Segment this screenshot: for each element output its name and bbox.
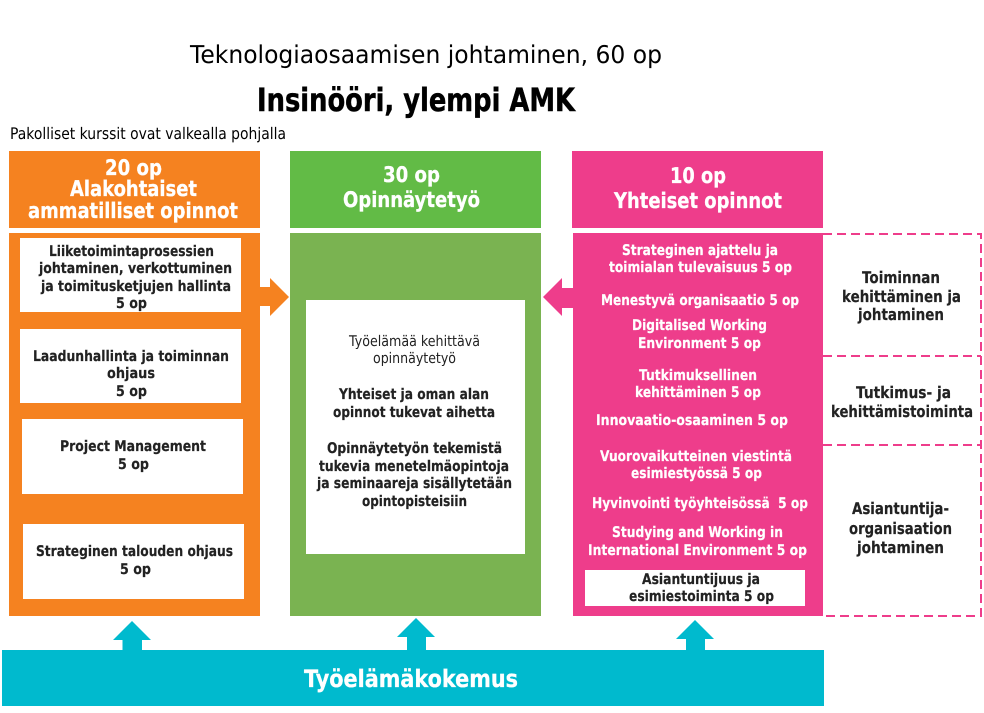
course: Laadunhallinta: 5 op — [116, 383, 147, 400]
heading: pink column — [572, 151, 823, 228]
heading: orange column: 20 op — [105, 156, 162, 181]
course list: Strateginen ajattelu ja — [622, 242, 778, 259]
arrow: up to orange panel — [113, 621, 151, 650]
arrow: up to thesis panel — [397, 618, 435, 650]
thesis text box: opinnäytetyö — [373, 350, 456, 367]
theme label: Tutkimus- ja kehittämistoiminta: Tutkimus- ja — [856, 383, 951, 402]
course: Project Management: Project Management — [60, 438, 206, 455]
theme label: Asiantuntijaorganisaation johtaminen: Asiantuntija- — [852, 499, 949, 518]
course: Laadunhallinta — [20, 329, 241, 403]
heading: orange column: ammatilliset opinnot — [28, 199, 238, 224]
theme label: Toiminnan kehittäminen ja johtaminen: kehittäminen ja — [842, 287, 961, 306]
thesis text box: Opinnäytetyön tekemistä — [327, 440, 502, 457]
dashed outline: theme areas — [823, 234, 981, 616]
thesis text box: ja seminaareja sisällytetään — [316, 475, 512, 492]
theme label: Tutkimus- ja kehittämistoiminta — [831, 383, 973, 421]
panel: shared studies — [573, 233, 823, 616]
note: mandatory courses: Pakolliset kurssit ovat valkealla pohjalla — [10, 124, 286, 143]
heading: green column: 30 op — [383, 163, 440, 188]
arrow: orange to thesis — [260, 278, 289, 316]
title: Teknologiaosaamisen johtaminen, 60 op — [189, 40, 662, 69]
thesis text box: tukevia menetelmäopintoja — [319, 458, 509, 475]
theme label: Asiantuntijaorganisaation johtaminen: organisaation — [849, 519, 952, 538]
heading: green column — [290, 151, 541, 228]
thesis text box — [306, 300, 525, 554]
course list: Menestyvä organisaatio 5 op — [601, 292, 799, 309]
course list: Innovaatio-osaaminen 5 op — [596, 412, 788, 429]
thesis text box: Yhteiset ja oman alan — [338, 386, 489, 403]
course: Strateginen talouden ohjaus: 5 op — [120, 561, 151, 578]
heading: green column: Opinnäytetyö — [343, 188, 480, 213]
theme label: Asiantuntijaorganisaation johtaminen: johtaminen — [856, 538, 944, 557]
course: Project Management — [22, 419, 243, 494]
course: Laadunhallinta: Laadunhallinta ja toiminnan — [33, 348, 229, 365]
panel: orange courses — [9, 233, 260, 616]
course: Asiantuntijuus ja esimiestoiminta: Asiantuntijuus ja — [642, 571, 760, 588]
course list: toimialan tulevaisuus 5 op — [609, 259, 792, 276]
course: Asiantuntijuus ja esimiestoiminta: esimiestoiminta 5 op — [629, 588, 774, 605]
course list: Studying and Working in — [612, 524, 783, 541]
course list: Hyvinvointi työyhteisössä 5 op — [592, 495, 808, 512]
theme label: Toiminnan kehittäminen ja johtaminen: johtaminen — [857, 305, 944, 324]
heading: orange column — [9, 151, 260, 228]
course list — [588, 242, 808, 559]
course list: Tutkimuksellinen — [639, 367, 757, 384]
course: Liiketoimintaprosessien: ja toimitusketjujen hallinta — [40, 278, 231, 295]
arrow: pink to thesis — [543, 278, 573, 316]
heading: pink column: Yhteiset opinnot — [613, 189, 782, 214]
thesis text box: Työelämää kehittävä — [348, 333, 480, 350]
course: Liiketoimintaprosessien: 5 op — [116, 295, 147, 312]
course: Strateginen talouden ohjaus: Strateginen talouden ohjaus — [36, 543, 233, 560]
course: Laadunhallinta: ohjaus — [107, 365, 155, 382]
course: Liiketoimintaprosessien: johtaminen, verkottuminen — [38, 260, 232, 277]
theme label: Toiminnan kehittäminen ja johtaminen — [842, 268, 961, 324]
heading: pink column: 10 op — [670, 164, 726, 189]
bar: work experience — [2, 650, 824, 706]
course list: kehittäminen 5 op — [635, 384, 761, 401]
heading: orange column: Alakohtaiset — [70, 177, 197, 202]
course: Liiketoimintaprosessien — [20, 238, 241, 312]
course: Project Management: 5 op — [118, 456, 149, 473]
thesis text box: opintopisteisiin — [362, 493, 467, 510]
course: Asiantuntijuus ja esimiestoiminta — [585, 570, 805, 606]
bar: work experience: Työelämäkokemus — [304, 665, 518, 693]
course: Strateginen talouden ohjaus — [23, 524, 244, 599]
subtitle: Insinööri, ylempi AMK — [257, 81, 576, 119]
course list: International Environment 5 op — [588, 542, 807, 559]
panel: thesis — [290, 233, 541, 616]
course list: Vuorovaikutteinen viestintä — [600, 448, 792, 465]
thesis text box: opinnot tukevat aihetta — [333, 404, 495, 421]
course list: Digitalised Working — [632, 317, 767, 334]
course: Liiketoimintaprosessien: Liiketoimintaprosessien — [49, 243, 214, 260]
course list: Environment 5 op — [638, 335, 761, 352]
theme label: Toiminnan kehittäminen ja johtaminen: Toiminnan — [862, 268, 940, 287]
theme label: Asiantuntijaorganisaation johtaminen — [849, 499, 952, 557]
arrow: up to pink panel — [676, 620, 714, 650]
course list: esimiestyössä 5 op — [631, 465, 762, 482]
